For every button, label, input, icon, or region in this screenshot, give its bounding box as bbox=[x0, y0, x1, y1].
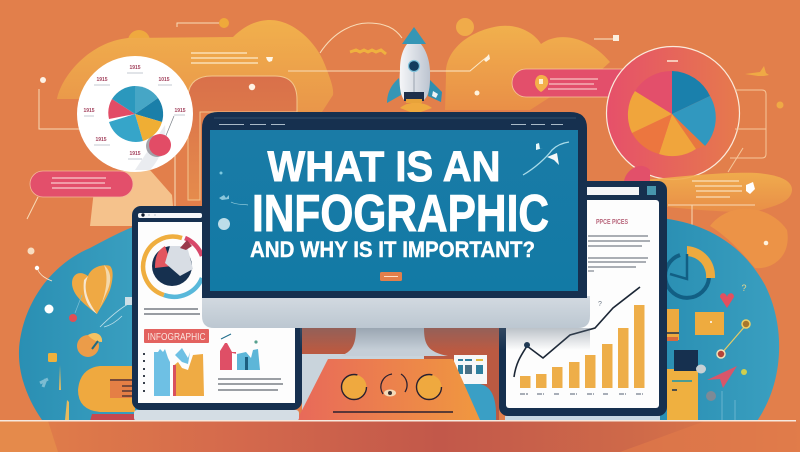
teal blob, left bbox=[19, 226, 140, 421]
pie labels bbox=[83, 65, 186, 157]
fins bbox=[387, 78, 401, 103]
pink callout, right bbox=[512, 69, 625, 97]
dark orange rounded panel, left bbox=[188, 76, 297, 200]
icon: heart balloon bbox=[72, 265, 113, 314]
monitor shadow bbox=[300, 328, 590, 350]
title: AND WHY IS IT IMPORTANT? bbox=[250, 237, 535, 262]
small decorations bbox=[28, 248, 34, 254]
white pie chart circle bbox=[77, 56, 193, 172]
paper plane bbox=[707, 366, 737, 388]
icon: bulb bbox=[535, 75, 548, 92]
left tablet bbox=[132, 206, 302, 410]
right tablet bbox=[499, 181, 667, 416]
button bbox=[380, 272, 402, 281]
red callout dot bbox=[146, 134, 171, 157]
desk object: yellow box bbox=[667, 309, 706, 421]
outlined panels, right bbox=[728, 90, 766, 172]
pink blob behind right tablet bbox=[624, 166, 650, 181]
screen decorations bbox=[218, 142, 569, 230]
node connector bbox=[717, 320, 750, 358]
tablet heading: PPCE PICES bbox=[596, 219, 628, 226]
monitor bezel bbox=[202, 112, 587, 298]
bar chart bbox=[520, 305, 644, 388]
flame bbox=[400, 103, 432, 113]
right tablet: ? bbox=[598, 301, 602, 308]
connector lines left bbox=[39, 23, 402, 129]
left tablet foot bbox=[134, 410, 299, 421]
orange corner blob bbox=[710, 209, 788, 268]
pie labels: 1015 bbox=[158, 77, 170, 83]
coral trapezoid base bbox=[297, 359, 480, 420]
pie labels: 1915 bbox=[95, 137, 107, 143]
plane icon, right bbox=[745, 66, 769, 76]
teal blob, right bbox=[660, 209, 788, 421]
floor line bbox=[0, 420, 796, 422]
circle icons bbox=[333, 374, 453, 412]
peach figure behind bbox=[90, 170, 173, 226]
floor band bbox=[0, 421, 800, 452]
pie labels: 1915 bbox=[96, 77, 108, 83]
title: WHAT IS AN bbox=[268, 143, 500, 191]
pie labels: 1915 bbox=[129, 151, 141, 157]
teal stand base bbox=[463, 384, 496, 421]
small chart bbox=[220, 334, 260, 370]
large ring pie chart, right bbox=[606, 46, 740, 180]
pie slices bbox=[628, 71, 716, 156]
small data card bbox=[454, 355, 487, 384]
body bbox=[400, 38, 430, 100]
label: infographic: INFOGRAPHIC bbox=[148, 331, 206, 343]
yellow square bbox=[695, 312, 724, 335]
yellow rounded object bbox=[78, 366, 135, 412]
pie labels: 1915 bbox=[83, 108, 95, 114]
icon: gauge bbox=[665, 246, 715, 298]
icon: orange flower bbox=[77, 333, 102, 357]
trend line bbox=[514, 287, 640, 377]
window bbox=[408, 60, 420, 72]
monitor stand neck bbox=[340, 328, 448, 356]
tablet text lines 2 bbox=[218, 379, 283, 390]
donut chart bbox=[143, 237, 202, 297]
bars with peaks bbox=[154, 348, 204, 396]
pink callout, left bbox=[27, 171, 133, 219]
rust wall behind the stand bbox=[302, 328, 499, 421]
monitor bbox=[202, 112, 590, 328]
pie labels: 1915 bbox=[174, 108, 186, 114]
connector top with dot bbox=[177, 18, 229, 28]
pie sublabels bbox=[84, 73, 185, 159]
pie slices bbox=[108, 86, 163, 142]
nav items bbox=[219, 124, 563, 126]
yellow note callout, right bbox=[645, 173, 792, 226]
bar labels bbox=[520, 393, 643, 395]
list ticks bbox=[143, 353, 145, 392]
base tab under right tablet bbox=[505, 416, 660, 421]
tablet text lines bbox=[588, 236, 650, 271]
tablet text lines bbox=[144, 309, 200, 314]
rocket bbox=[387, 27, 442, 113]
yellow cloud, right bbox=[430, 18, 619, 110]
monitor screen bbox=[210, 130, 578, 291]
small heart icon bbox=[266, 57, 273, 62]
text lines in yellow shape bbox=[191, 53, 258, 63]
icon: heart bbox=[720, 293, 734, 308]
yellow background shape, left bbox=[57, 20, 333, 112]
squiggle bbox=[350, 50, 386, 54]
title bbox=[250, 143, 549, 262]
vertical line bbox=[174, 150, 176, 206]
question mark: ? bbox=[741, 283, 747, 293]
title: INFOGRAPHIC bbox=[252, 185, 549, 243]
small yellow dot, right bbox=[776, 102, 784, 108]
pie labels: 1915 bbox=[129, 65, 141, 71]
monitor chin bbox=[202, 296, 590, 328]
nose cone bbox=[402, 27, 426, 44]
